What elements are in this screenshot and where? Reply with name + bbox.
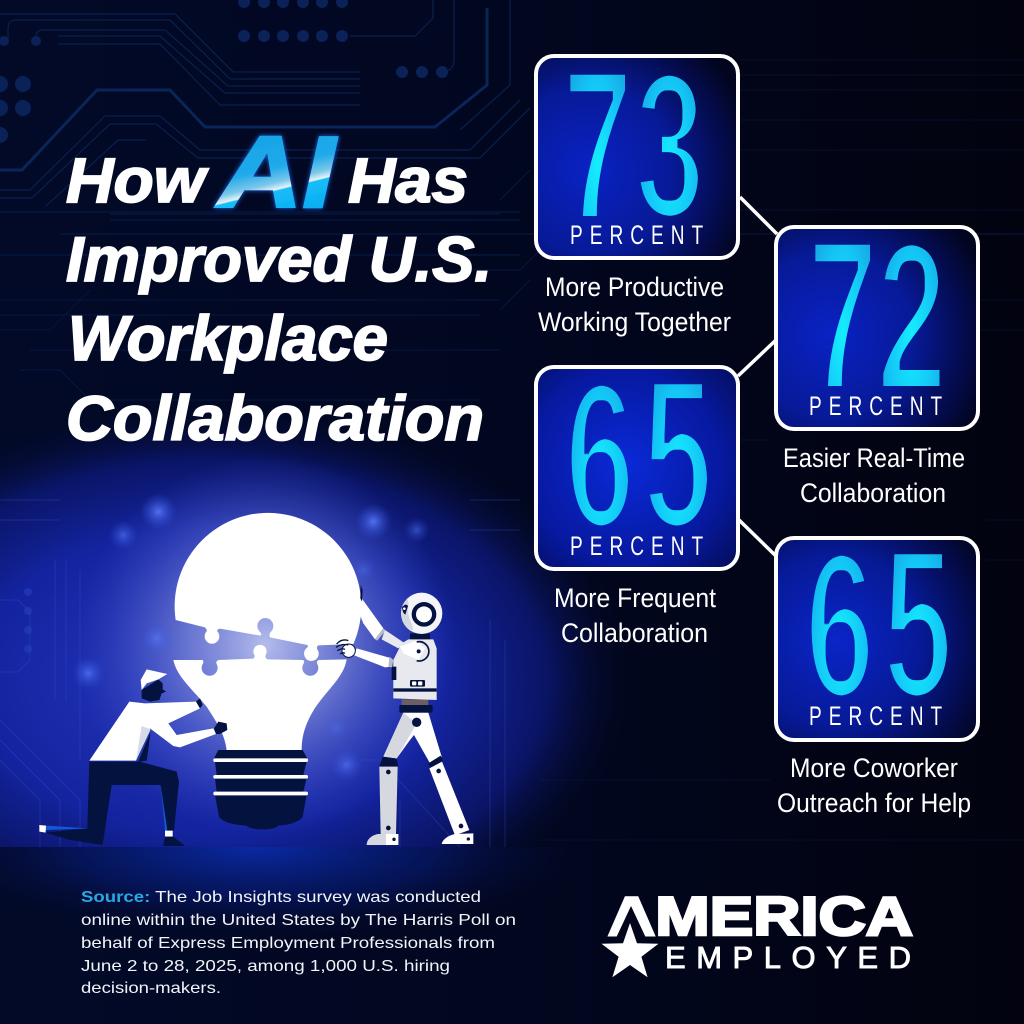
robot waist: [402, 699, 428, 705]
title: Collaboration: [66, 384, 484, 454]
number 65: 5: [643, 335, 713, 574]
trouser highlight: [46, 785, 167, 831]
number 65: 5: [883, 505, 953, 744]
number 72: 2: [877, 199, 947, 436]
stat card: 65 percent outreach: [776, 505, 978, 744]
man head: [142, 679, 166, 702]
bulb lower puzzle piece: [173, 645, 347, 751]
man trousers: [45, 762, 179, 845]
logo: America Employed: [602, 885, 913, 977]
man shirt: [89, 702, 216, 761]
number 65: [805, 505, 953, 744]
glow spots: [72, 493, 430, 782]
AI word: AI: [215, 117, 337, 229]
man hair: [141, 669, 167, 690]
caption: more productive: More Productive: [545, 272, 724, 302]
source note: behalf of Express Employment Professionals from: [81, 935, 495, 952]
number 72: 7: [808, 194, 878, 437]
stat card: 65 percent frequent: [536, 335, 738, 574]
man shoes: [39, 825, 173, 837]
caption: more frequent: [554, 583, 717, 648]
source note: [81, 889, 516, 997]
number 73: 7: [563, 24, 633, 267]
man neck: [149, 700, 158, 708]
robot legs: [383, 713, 442, 763]
logo: America Employed: EMPLOYED: [665, 940, 911, 975]
number 73: [563, 24, 705, 267]
logo: America Employed: AMERICA: [608, 885, 913, 947]
connectors between stat boxes: [738, 197, 777, 557]
source note: decision-makers.: [81, 980, 221, 997]
source note: Source: The Job Insights survey was conducted: [81, 889, 481, 906]
robot reaching arm: [353, 648, 392, 667]
man hands: [196, 698, 227, 734]
title: How: [66, 146, 209, 216]
title: [66, 117, 492, 454]
percent label: PERCENT: [809, 391, 942, 421]
source note: online within the United States by The Harris Poll on: [81, 912, 516, 929]
caption: easier real-time: [783, 443, 965, 508]
caption: more productive: Working Together: [538, 307, 731, 337]
robot feet: [367, 834, 398, 845]
robot neck: [410, 633, 430, 640]
number 72: [808, 194, 947, 437]
percent label: PERCENT: [809, 701, 942, 731]
caption: more frequent: Collaboration: [561, 618, 708, 648]
caption: coworker outreach: More Coworker: [790, 753, 958, 783]
robot torso: [393, 639, 437, 700]
title: Workplace: [68, 304, 388, 374]
robot: [336, 585, 473, 845]
title: Improved U.S.: [66, 225, 492, 295]
caption: more frequent: More Frequent: [554, 583, 717, 613]
bulb screw base: [213, 750, 308, 829]
title: Has: [348, 146, 468, 216]
bulb upper puzzle piece: [175, 513, 361, 661]
robot raised arm: [359, 595, 383, 639]
shoulder joint: [400, 641, 425, 660]
number 73: 3: [635, 29, 705, 262]
man pushing bulb: [39, 669, 227, 846]
source note: June 2 to 28, 2025, among 1,000 U.S. hiring: [81, 958, 450, 975]
stat card: 72 percent: [776, 194, 978, 437]
caption: easier real-time: Easier Real-Time: [783, 443, 965, 473]
number 65: 6: [565, 339, 635, 572]
caption: more productive: [538, 272, 731, 337]
illustration: people and robot joining a puzzle light bulb: [39, 493, 473, 846]
caption: easier real-time: Collaboration: [800, 478, 946, 508]
number 65: [565, 335, 713, 574]
robot hand: [336, 640, 355, 657]
caption: coworker outreach: [777, 753, 971, 818]
stat card: 73 percent: [536, 24, 738, 267]
percent label: PERCENT: [570, 220, 703, 250]
number 65: 6: [805, 509, 875, 742]
caption: coworker outreach: Outreach for Help: [777, 788, 971, 818]
icon: star: [602, 923, 658, 977]
percent label: PERCENT: [570, 531, 703, 561]
light bulb: [173, 513, 361, 829]
robot head: [401, 593, 442, 634]
